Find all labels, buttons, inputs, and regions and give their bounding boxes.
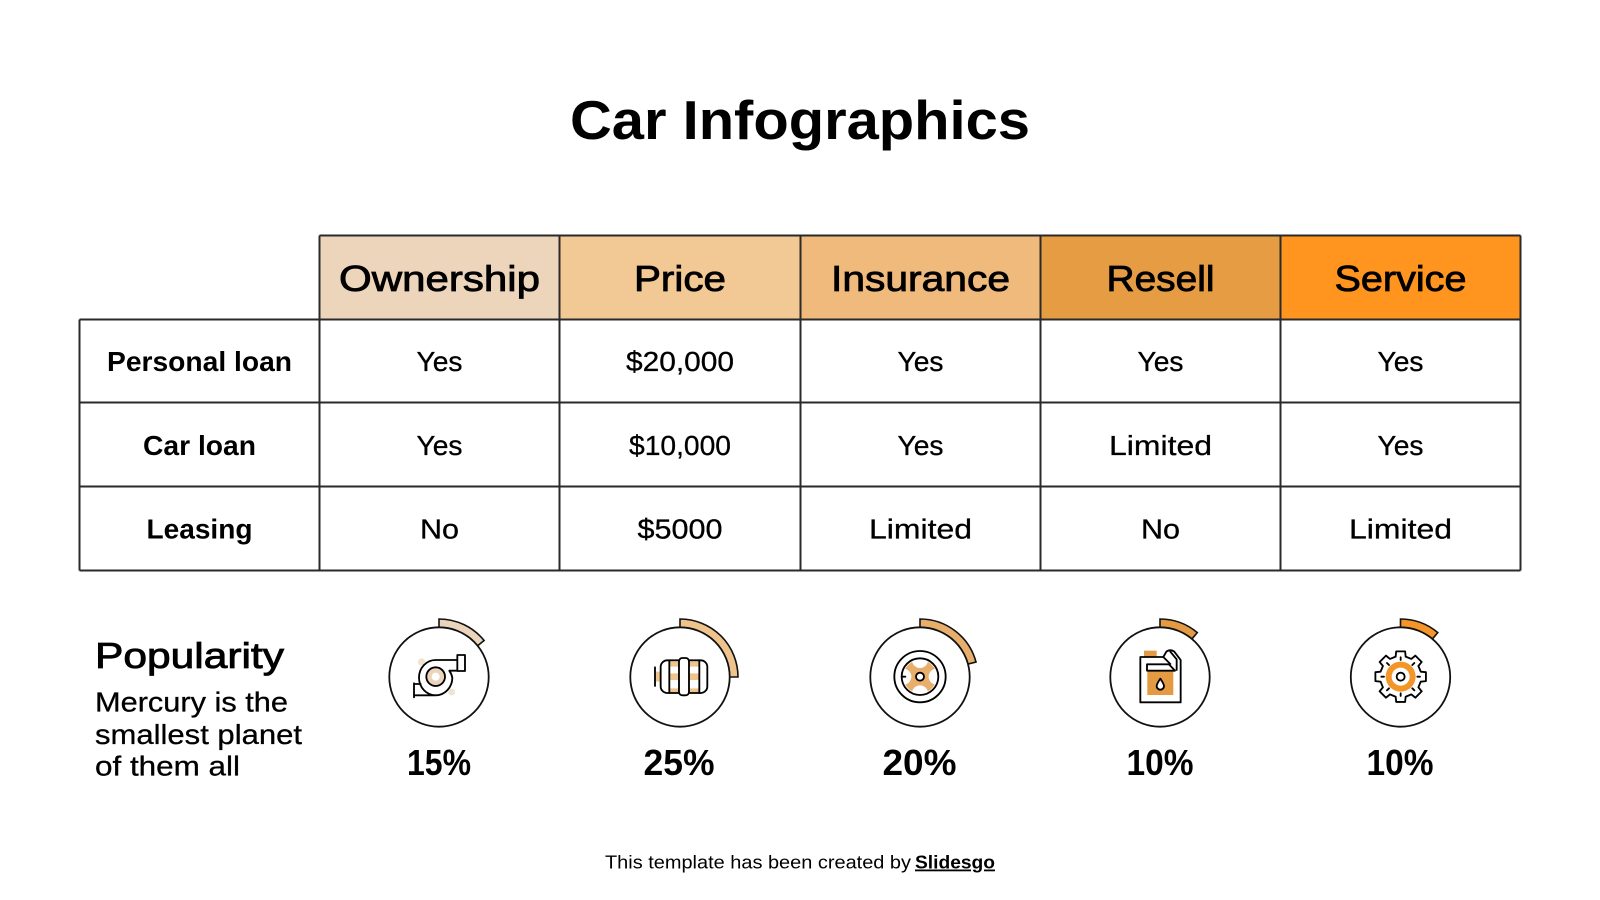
- row: leasing: No: [420, 514, 459, 544]
- row: personal loan: [107, 346, 1424, 377]
- row: leasing: Leasing: [146, 514, 252, 544]
- row: leasing: No: [1141, 514, 1180, 544]
- gauge: engine cylinder 25%: [630, 619, 738, 783]
- icon: cylinder: [655, 658, 707, 695]
- icon: oil canister: [1140, 650, 1181, 702]
- percent label: 25%: [644, 742, 714, 783]
- percent label: 20%: [882, 742, 956, 783]
- header row: [320, 236, 1520, 320]
- row: car loan: Yes: [416, 430, 462, 461]
- header row: Service: [1334, 258, 1466, 299]
- gauge: gear 10%: [1351, 619, 1450, 783]
- gauge: oil canister 10%: [1110, 619, 1210, 783]
- row: personal loan: Yes: [1138, 346, 1184, 377]
- row: personal loan: Yes: [416, 346, 462, 377]
- panel: comparison table: [80, 236, 1520, 570]
- icon: gear: [1375, 651, 1426, 702]
- popularity text block: [95, 635, 302, 782]
- row: car loan: Car loan: [143, 430, 256, 461]
- popularity text block: of them all: [95, 750, 240, 782]
- row: car loan: [143, 430, 1424, 461]
- icon: brake disc: [894, 651, 946, 702]
- percent label: 15%: [407, 742, 471, 783]
- header row: Insurance: [831, 258, 1010, 299]
- row: leasing: Limited: [869, 514, 972, 544]
- percent label: 10%: [1126, 742, 1194, 783]
- table grid lines: [80, 236, 1520, 570]
- popularity text block: smallest planet: [95, 719, 302, 750]
- header row: Price: [634, 258, 726, 299]
- row: leasing: Limited: [1349, 514, 1452, 544]
- title: Car Infographics: [570, 89, 1030, 151]
- footer credit: Slidesgo: [915, 852, 995, 872]
- header row: Ownership: [339, 258, 540, 299]
- gauge: turbocharger 15%: [389, 619, 489, 783]
- row: personal loan: $20,000: [626, 346, 734, 377]
- row: personal loan: Personal loan: [107, 346, 292, 377]
- icon: turbocharger: [414, 655, 465, 697]
- percent label: 10%: [1366, 742, 1434, 783]
- row: leasing: $5000: [638, 514, 722, 544]
- row: car loan: Yes: [898, 430, 944, 461]
- row: car loan: Limited: [1109, 430, 1212, 461]
- gauge: brake disc 20%: [870, 619, 976, 783]
- footer credit: This template has been created by: [605, 852, 911, 872]
- row: personal loan: Yes: [1378, 346, 1424, 377]
- popularity text block: Mercury is the: [95, 686, 288, 718]
- popularity text block: Popularity: [95, 635, 284, 676]
- header row: Resell: [1106, 258, 1214, 299]
- row: car loan: $10,000: [629, 430, 731, 461]
- row: leasing: [146, 514, 1452, 544]
- row: car loan: Yes: [1378, 430, 1424, 461]
- row: personal loan: Yes: [898, 346, 944, 377]
